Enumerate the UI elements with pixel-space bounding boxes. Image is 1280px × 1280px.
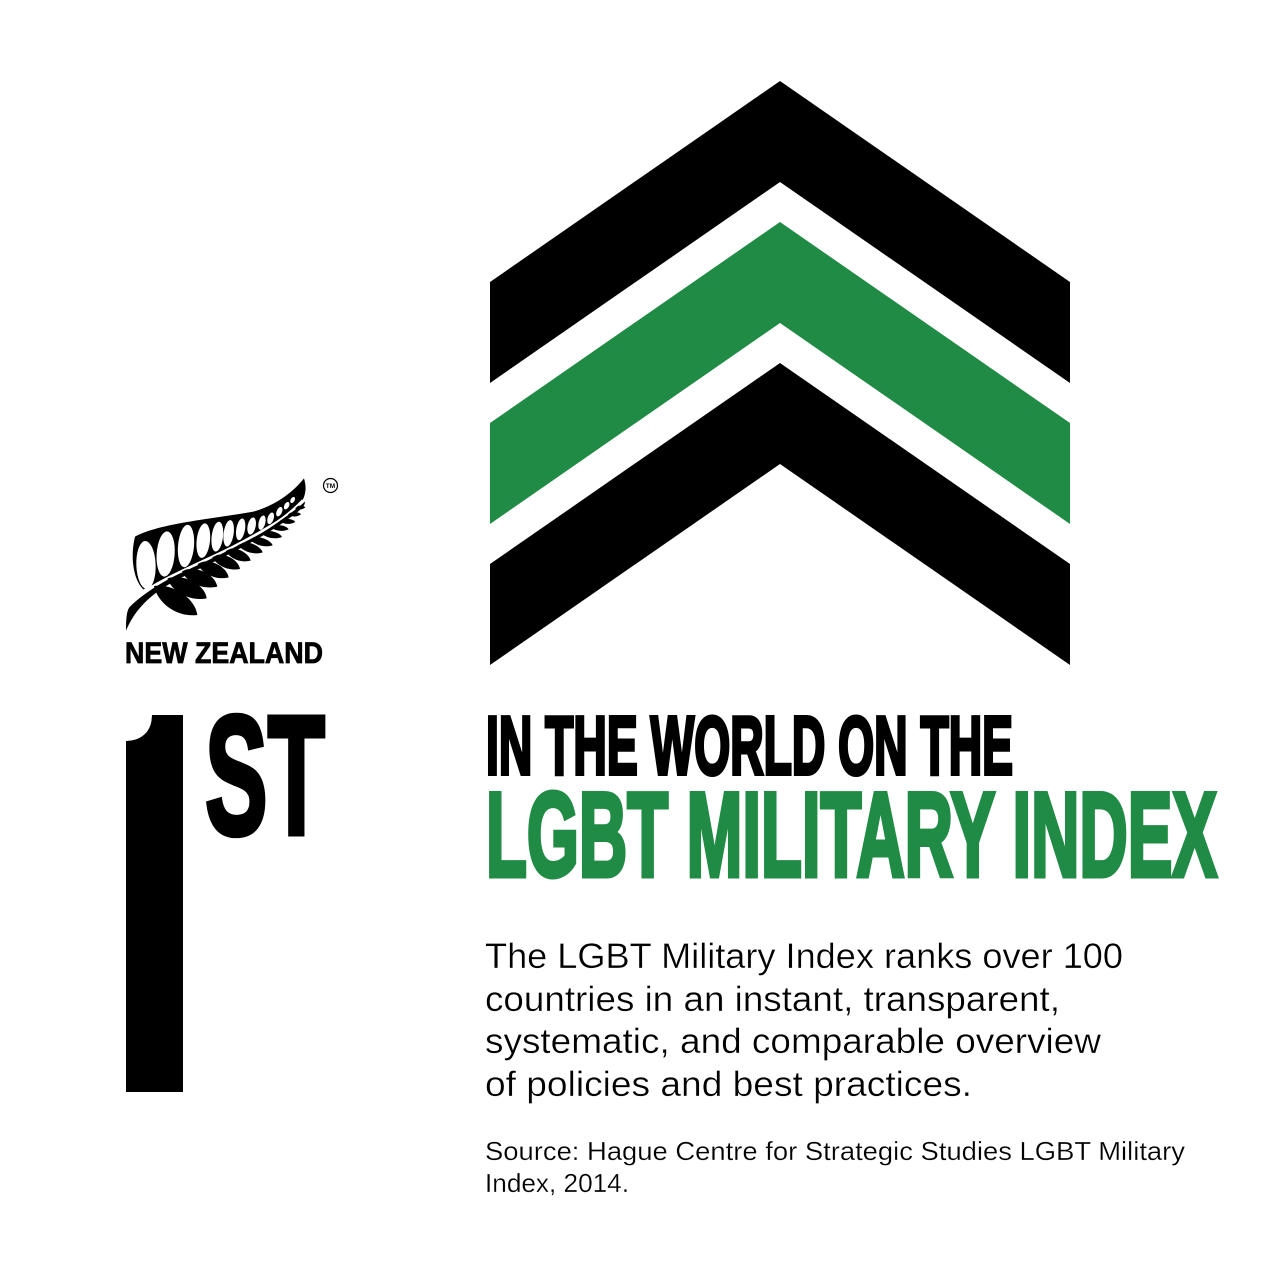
- body paragraph: systematic, and comparable overview: [485, 1022, 1102, 1061]
- icon: trademark symbol: [324, 478, 338, 492]
- body paragraph: [485, 937, 1123, 1104]
- body paragraph: of policies and best practices.: [485, 1065, 972, 1104]
- source note: [485, 1136, 1185, 1198]
- chevron: middle green: [490, 222, 1070, 524]
- heading: [486, 699, 1217, 902]
- source note: Index, 2014.: [485, 1168, 629, 1198]
- rank ordinal suffix: ST: [205, 681, 325, 871]
- icon: three stacked chevrons: [490, 81, 1070, 665]
- source note: Source: Hague Centre for Strategic Studies LGBT Military: [485, 1136, 1185, 1166]
- logo wordmark: NEW ZEALAND: [125, 637, 323, 670]
- icon: silver fern: [126, 478, 306, 631]
- chevron: bottom black: [490, 363, 1070, 665]
- logo: New Zealand fern: [125, 478, 338, 670]
- body paragraph: countries in an instant, transparent,: [485, 980, 1060, 1019]
- icon: trademark symbol: TM: [326, 483, 335, 490]
- body paragraph: The LGBT Military Index ranks over 100: [485, 937, 1123, 976]
- chevron: top black: [490, 81, 1070, 383]
